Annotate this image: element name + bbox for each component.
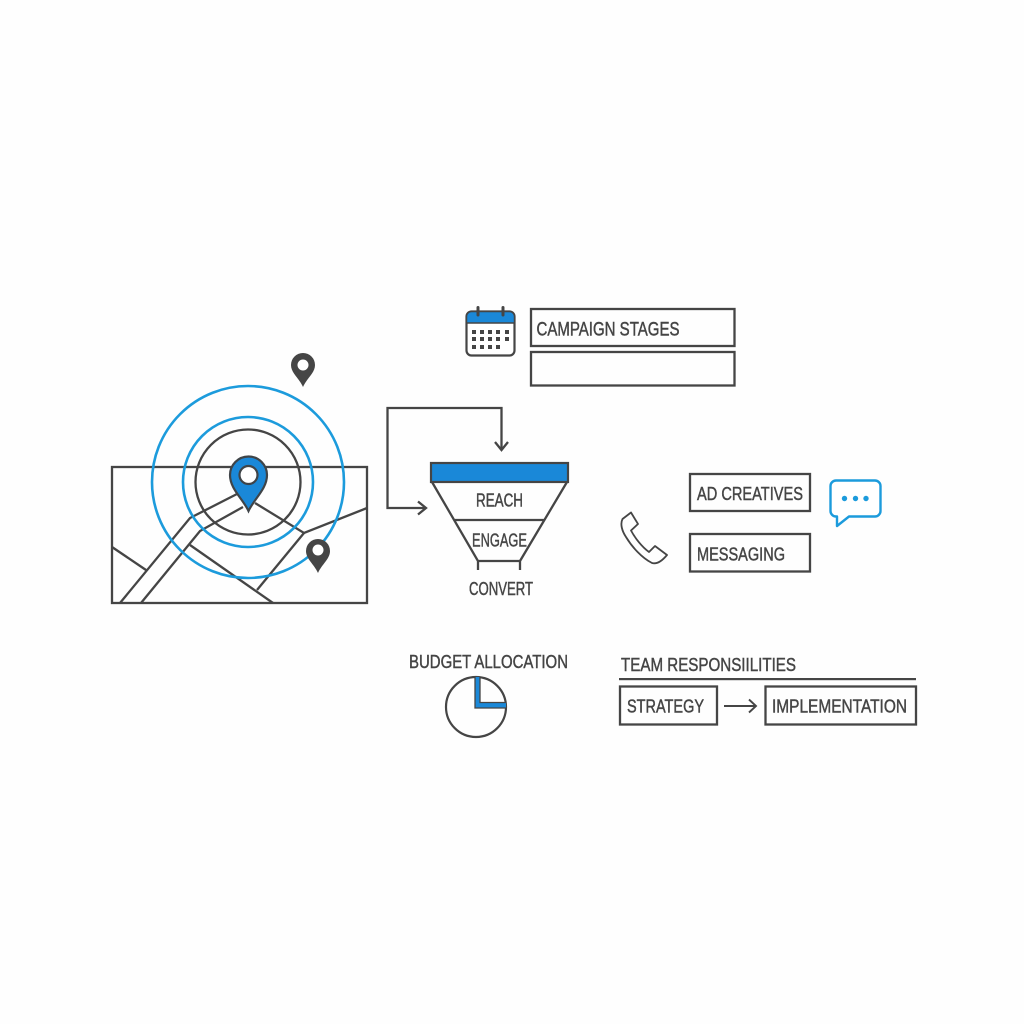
strategy box	[620, 686, 717, 724]
icon: chat bubble	[830, 480, 880, 526]
ad creatives box	[690, 474, 810, 511]
engage label: ENGAGE	[472, 530, 527, 550]
arrow: strategy to implementation	[724, 700, 756, 712]
icon: lower grey location pin	[306, 539, 330, 573]
messaging label: MESSAGING	[697, 544, 785, 564]
budget allocation heading: BUDGET ALLOCATION	[409, 652, 568, 672]
funnel top blue band	[431, 463, 568, 482]
implementation label: IMPLEMENTATION	[772, 696, 907, 716]
pie chart	[446, 677, 506, 737]
implementation box	[766, 686, 916, 724]
icon: central blue location pin	[230, 456, 267, 511]
strategy label: STRATEGY	[627, 696, 704, 716]
reach label: REACH	[476, 490, 523, 510]
icon: telephone handset	[621, 512, 667, 563]
map roads	[112, 494, 367, 603]
empty stage box	[531, 352, 734, 386]
heading rule	[619, 678, 916, 680]
panel: campaign stages	[466, 308, 734, 386]
team responsibilities heading: TEAM RESPONSIILITIES	[621, 655, 796, 675]
campaign stages box	[531, 309, 734, 346]
panel: marketing funnel	[388, 408, 568, 599]
panel: team responsibilities	[619, 655, 916, 724]
messaging box	[690, 534, 810, 572]
map frame	[112, 467, 367, 603]
icon: upper grey location pin	[291, 353, 315, 387]
ad creatives label: AD CREATIVES	[697, 484, 803, 504]
icon: calendar	[466, 308, 514, 356]
targeting radius rings	[152, 386, 344, 578]
funnel outline	[432, 482, 567, 570]
panel: budget allocation	[409, 652, 568, 737]
panel: creatives and messaging	[621, 474, 880, 572]
convert label: CONVERT	[469, 579, 533, 599]
campaign stages label: CAMPAIGN STAGES	[536, 320, 680, 340]
feedback arrow	[388, 408, 508, 514]
panel: location map	[112, 353, 367, 603]
